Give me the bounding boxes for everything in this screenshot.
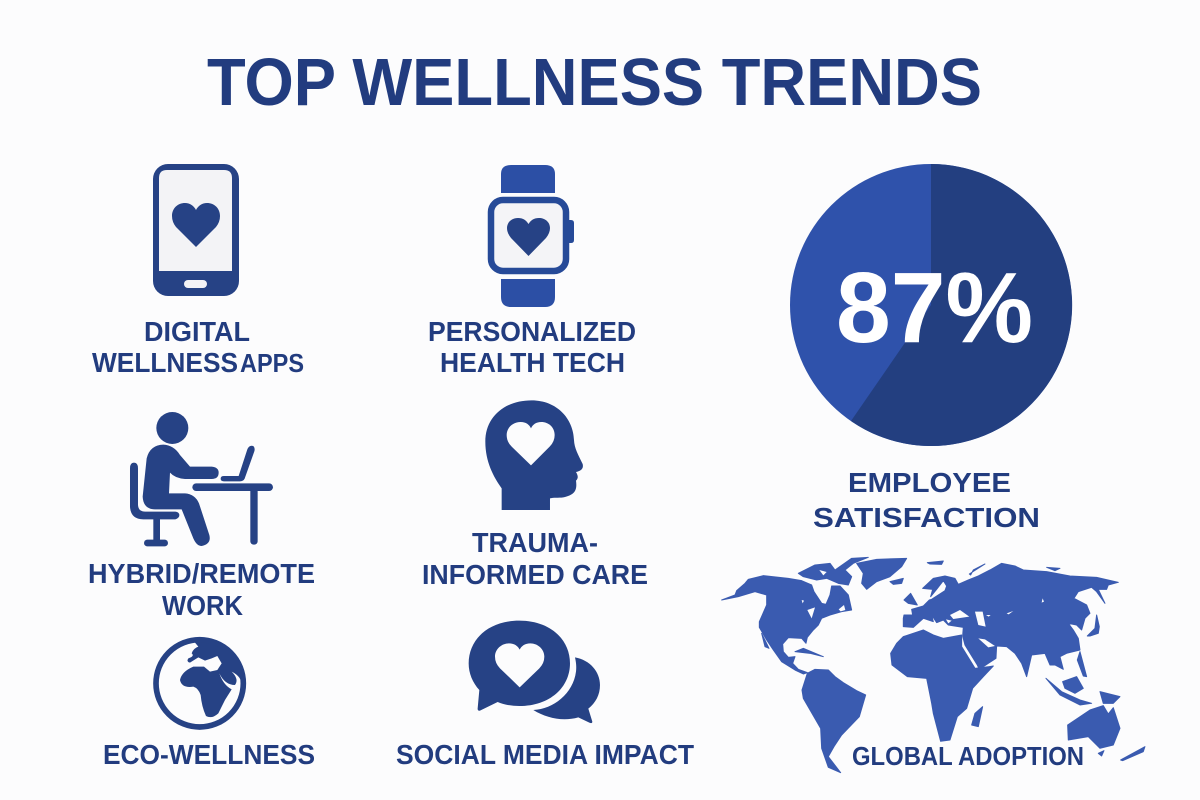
label: digital wellness apps xyxy=(92,316,304,378)
panel: trauma-informed care xyxy=(422,400,648,590)
label: personalized health tech: HEALTH TECH xyxy=(440,347,625,378)
label: digital wellness apps: DIGITAL xyxy=(144,316,250,347)
panel: hybrid remote work xyxy=(88,412,315,621)
panel: digital wellness apps xyxy=(92,164,304,378)
north america and greenland xyxy=(722,557,907,674)
label: digital wellness apps: APPS xyxy=(240,348,304,378)
panel: global adoption xyxy=(722,557,1145,773)
label: trauma-informed care: INFORMED CARE xyxy=(422,559,648,590)
eurasia xyxy=(903,561,1118,677)
label: personalized health tech: PERSONALIZED xyxy=(428,316,636,347)
title: TOP WELLNESS TRENDS xyxy=(207,45,982,120)
label: digital wellness apps: WELLNESS xyxy=(92,347,238,378)
label: eco-wellness: ECO-WELLNESS xyxy=(103,739,315,770)
southeast asia islands xyxy=(1046,678,1092,705)
label: employee satisfaction: EMPLOYEE xyxy=(848,467,1011,498)
africa xyxy=(891,630,993,741)
label: personalized health tech xyxy=(428,316,636,378)
icon: head profile with heart xyxy=(485,400,583,510)
south america xyxy=(802,669,866,773)
world map xyxy=(722,557,1145,773)
pie chart: 87% xyxy=(790,164,1072,446)
panel: eco-wellness xyxy=(103,639,315,770)
label: global adoption: GLOBAL ADOPTION xyxy=(852,741,1084,771)
label: employee satisfaction xyxy=(813,467,1040,533)
panel: personalized health tech xyxy=(428,165,636,378)
pie chart: 87%: 87% xyxy=(836,252,1033,364)
panel: employee satisfaction xyxy=(790,164,1072,533)
icon: smartwatch with heart xyxy=(491,165,574,307)
label: social media impact: SOCIAL MEDIA IMPACT xyxy=(396,739,694,770)
icon: smartphone with heart xyxy=(153,164,239,296)
label: hybrid remote work xyxy=(88,558,315,621)
australia xyxy=(1068,706,1120,748)
new zealand xyxy=(1121,747,1145,761)
label: trauma-informed care: TRAUMA- xyxy=(472,527,598,558)
label: hybrid remote work: HYBRID/REMOTE xyxy=(88,558,315,589)
icon: person at desk with laptop xyxy=(130,412,273,546)
label: employee satisfaction: SATISFACTION xyxy=(813,502,1040,533)
icon: speech bubbles with heart xyxy=(469,621,600,723)
label: trauma-informed care xyxy=(422,527,648,590)
icon: globe xyxy=(156,639,244,727)
madagascar xyxy=(972,707,983,727)
panel: social media impact xyxy=(396,621,694,770)
label: hybrid remote work: WORK xyxy=(162,590,243,621)
